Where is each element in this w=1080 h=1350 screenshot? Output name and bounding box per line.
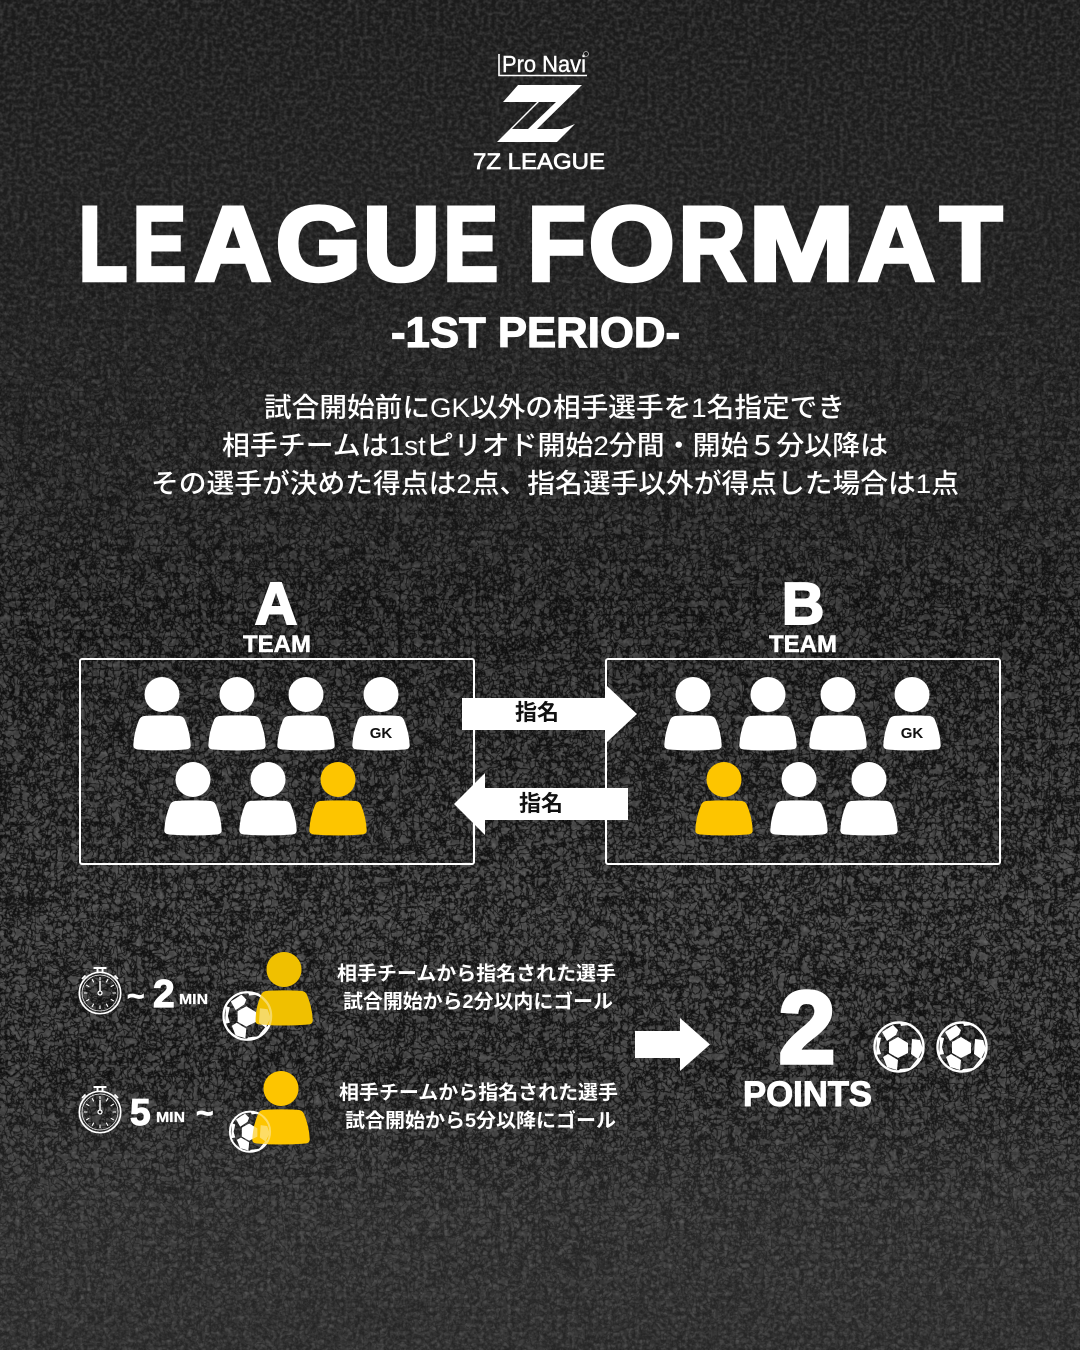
logo: 7Z LEAGUE: 7Z LEAGUE <box>473 149 605 174</box>
title: T <box>940 186 1002 303</box>
title: G <box>276 186 361 303</box>
label: GK A: GK <box>370 725 392 742</box>
label: from 5 min: MIN <box>156 1109 185 1126</box>
title: E <box>133 186 186 303</box>
text: rule 5 min <box>339 1082 618 1132</box>
label: up to 2 min: 2 <box>153 973 175 1016</box>
icon: ball and player 2 min <box>224 952 313 1040</box>
result: 2 points: 2 <box>778 970 836 1085</box>
text: rule 5 min: 試合開始から5分以降にゴール <box>345 1109 616 1132</box>
team B heading: B <box>782 571 824 637</box>
label: from 5 min: ~ <box>196 1097 214 1130</box>
arrow: to result <box>635 1018 710 1071</box>
text: rule 2 min: 相手チームから指名された選手 <box>337 963 616 985</box>
logo: Pro Navi 7Z League <box>473 51 605 174</box>
text: rule 5 min: 相手チームから指名された選手 <box>339 1082 618 1104</box>
description text: その選手が決めた得点は2点、指名選手以外が得点した場合は1点 <box>151 469 959 499</box>
title: U <box>363 186 440 303</box>
text: rule 2 min: 試合開始から2分以内にゴール <box>343 990 613 1013</box>
title: L <box>79 186 127 303</box>
rule row: within 2 minutes <box>79 952 616 1040</box>
title: O <box>589 186 675 303</box>
logo: double Z mark <box>497 85 582 142</box>
title: A <box>195 186 271 303</box>
arrow: A nominates B: 指名 <box>515 700 559 725</box>
title: M <box>748 186 854 303</box>
team B heading <box>769 571 837 658</box>
icon: stopwatch 5 min <box>79 1087 121 1133</box>
label: up to 2 min: ~ <box>127 980 145 1013</box>
title: F <box>528 186 586 303</box>
label: GK B: GK <box>901 725 923 742</box>
icon: ball 2 <box>938 1022 986 1072</box>
panel: team A <box>80 659 474 864</box>
icon: stopwatch 2 min <box>79 968 121 1014</box>
player: nominated A <box>309 762 367 836</box>
panel: team B <box>606 659 1000 864</box>
description text: 試合開始前にGK以外の相手選手を1名指定でき <box>264 393 845 423</box>
label: up to 2 min: MIN <box>179 991 208 1008</box>
title <box>79 186 1002 303</box>
icon: ball and player 5 min <box>230 1071 310 1152</box>
rule row: after 5 minutes <box>79 1071 618 1152</box>
label: from 5 min: 5 <box>130 1092 151 1133</box>
title: R <box>679 186 746 303</box>
icon: ball 1 <box>874 1022 924 1072</box>
title: E <box>444 186 498 303</box>
team B heading: TEAM <box>769 631 837 658</box>
logo: Pro Navi wordmark: Pro Navi <box>502 51 586 77</box>
player: nominated B <box>695 762 753 836</box>
arrow: B nominates A <box>454 773 628 835</box>
label: up to 2 min <box>127 973 208 1016</box>
description text <box>151 393 959 499</box>
label: from 5 min <box>130 1092 214 1133</box>
subtitle: -1ST PERIOD- <box>391 309 680 357</box>
team A heading: TEAM <box>243 631 311 658</box>
team A heading <box>243 571 311 658</box>
team A heading: A <box>255 571 297 637</box>
description text: 相手チームは1stピリオド開始2分間・開始５分以降は <box>222 431 888 461</box>
result: 2 points: POINTS <box>743 1075 872 1114</box>
arrow: B nominates A: 指名 <box>519 791 563 816</box>
text: rule 2 min <box>337 963 616 1013</box>
result: 2 points <box>743 970 986 1114</box>
title: A <box>858 186 935 303</box>
arrow: A nominates B <box>462 686 637 742</box>
